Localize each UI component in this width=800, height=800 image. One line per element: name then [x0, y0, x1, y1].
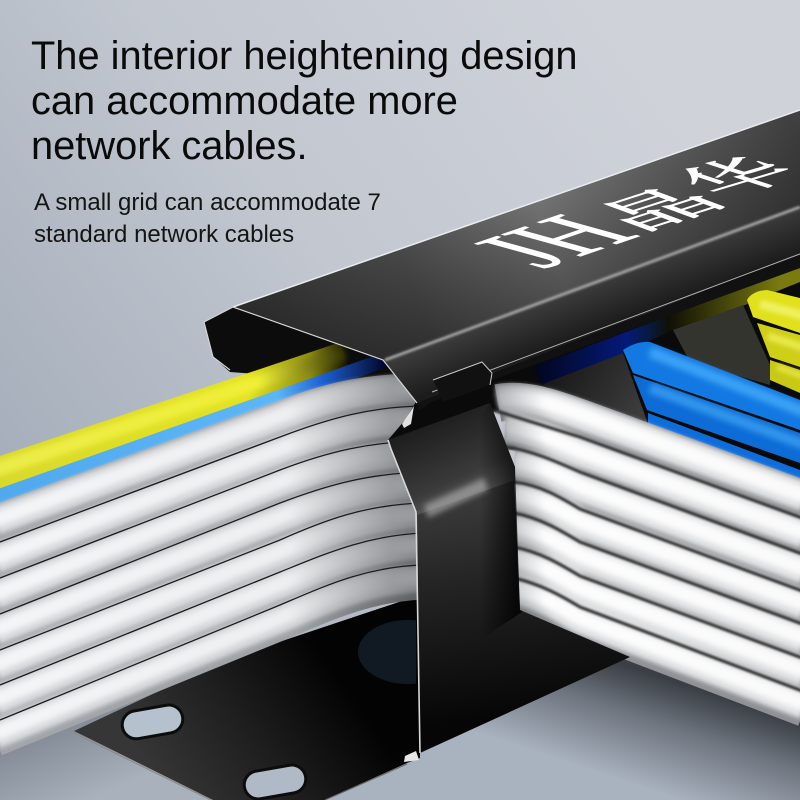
floor surface and shadow — [0, 655, 800, 800]
clip joining cover and support — [433, 362, 492, 402]
top edge highlight — [233, 110, 800, 307]
chevron bracket tip — [402, 406, 414, 428]
yellow cable left — [0, 353, 345, 474]
logo latin letters: JH — [436, 206, 668, 276]
title: network cables. — [31, 124, 308, 168]
duct interior right — [388, 260, 800, 490]
title: can accommodate more — [31, 79, 458, 123]
cable glow band under lid — [533, 268, 800, 385]
fold highlight — [385, 207, 800, 360]
lower lip — [417, 253, 800, 410]
divider panel one — [543, 353, 648, 424]
end profile outline — [204, 307, 417, 403]
white cables left — [0, 388, 422, 738]
white cables right — [493, 398, 800, 708]
subtitle — [34, 189, 381, 248]
subtitle: A small grid can accommodate 7 — [34, 189, 381, 216]
logo character one: 晶 — [578, 180, 744, 238]
front face — [383, 207, 800, 403]
large round hole — [358, 620, 416, 684]
mounting hole right — [242, 763, 308, 800]
base plate with mounting holes — [74, 600, 420, 800]
top face with logo — [233, 110, 800, 360]
blue cable left — [0, 360, 385, 498]
vertical duct support — [388, 403, 630, 762]
yellow cables right — [747, 290, 800, 393]
title — [31, 34, 577, 168]
left interior of duct — [204, 307, 420, 410]
mounting hole left — [120, 703, 185, 741]
divider panel two — [673, 305, 770, 385]
right edge shade — [486, 408, 522, 628]
logo — [436, 151, 800, 276]
blue cables right — [623, 342, 800, 482]
duct cover — [204, 110, 800, 428]
subtitle: standard network cables — [34, 221, 294, 248]
soft highlight on the bend — [424, 478, 488, 518]
title: The interior heightening design — [31, 34, 577, 78]
